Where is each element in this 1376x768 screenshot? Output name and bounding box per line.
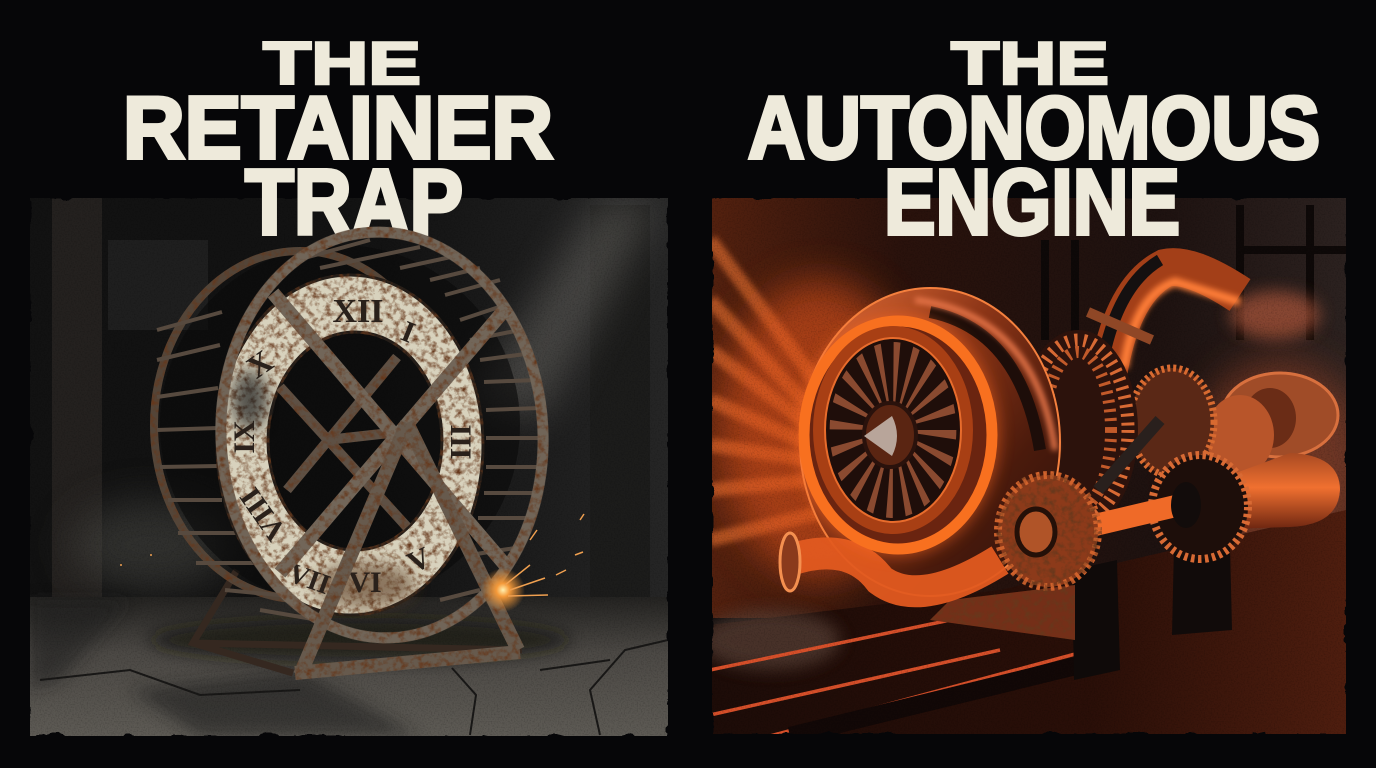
floor <box>710 510 1346 736</box>
rear drum <box>1206 395 1274 475</box>
roman numerals: IX <box>228 420 261 454</box>
exhaust pipe <box>1108 267 1240 375</box>
smoke <box>70 500 230 590</box>
left pillar <box>52 198 102 618</box>
roman numerals: III <box>444 424 477 460</box>
drum teeth row 2 <box>1045 352 1111 508</box>
front ring <box>211 224 553 646</box>
roman numerals: V <box>402 541 436 580</box>
front cross bars <box>273 293 507 573</box>
roman numerals: I <box>396 315 420 350</box>
rails <box>710 618 1090 736</box>
a-frame stand <box>295 423 520 675</box>
gear 2 <box>1152 455 1248 559</box>
rail shadow <box>790 665 1080 736</box>
fan ring inner glow <box>813 326 973 534</box>
light beam <box>470 200 660 420</box>
concrete floor <box>30 597 668 737</box>
orange speed rays <box>710 240 830 540</box>
dial rust patch <box>315 563 415 607</box>
steam <box>1230 291 1320 339</box>
pipe dark shine <box>1103 260 1160 360</box>
title: the autonomous engine <box>748 30 1320 254</box>
title: the autonomous engine: ENGINE <box>884 150 1180 254</box>
roman numerals: VII <box>284 558 334 601</box>
stand 1 <box>1072 560 1120 680</box>
rear wheel hub <box>1244 388 1296 448</box>
right haze <box>1200 342 1346 534</box>
rear wheel <box>1222 373 1338 457</box>
inner dial shadow <box>232 370 268 430</box>
glowing ring <box>804 321 992 549</box>
inlet mouth <box>780 533 800 591</box>
title: the retainer trap: RETAINER <box>123 78 553 177</box>
rear cross bars <box>280 357 407 527</box>
pipe hot shine <box>1124 282 1240 368</box>
grit right <box>710 198 1346 734</box>
ring glow <box>798 315 998 555</box>
gear 3 <box>1130 368 1214 476</box>
pipe flange <box>1088 312 1152 340</box>
clock face <box>217 275 483 615</box>
floor dark patches <box>30 600 420 736</box>
housing tube dark band <box>930 312 1040 450</box>
torn edge: left panel <box>22 190 676 744</box>
background pillars <box>1045 205 1346 340</box>
title: the autonomous engine: THE <box>951 30 1109 97</box>
turbine housing <box>800 288 1060 596</box>
drum teeth row 1 <box>1028 340 1128 520</box>
back frame <box>193 570 522 673</box>
inlet pipe <box>790 553 1000 591</box>
lower cylinder <box>1190 453 1340 530</box>
panel: autonomous engine background <box>700 198 1370 736</box>
title: the autonomous engine: AUTONOMOUS <box>748 78 1320 177</box>
gear 1 <box>998 475 1098 587</box>
roman numerals: VI <box>348 566 382 599</box>
gear hub <box>1017 509 1055 555</box>
fan blades <box>853 375 933 485</box>
housing tube highlight <box>915 300 1055 450</box>
base block <box>930 585 1075 640</box>
roman numerals: XII <box>332 293 384 330</box>
stand 2 <box>1172 545 1232 635</box>
lower left smoke <box>700 610 840 670</box>
right pillar <box>624 205 650 597</box>
floor cracks <box>40 640 668 735</box>
nose cone <box>864 416 897 456</box>
title: the retainer trap <box>123 30 553 254</box>
fan disc <box>825 338 961 522</box>
title: the retainer trap: TRAP <box>245 150 463 254</box>
roman numerals: VIII <box>233 481 293 547</box>
shaft collar <box>1171 482 1201 528</box>
wheel rungs <box>157 240 541 622</box>
hub <box>864 403 916 467</box>
turbine engine <box>780 260 1340 680</box>
title: the retainer trap: THE <box>263 30 421 97</box>
roman numerals: X <box>240 342 279 385</box>
roman numerals <box>228 293 477 601</box>
toothed drum <box>1018 330 1138 530</box>
back ring <box>154 251 446 599</box>
grit left <box>30 198 668 736</box>
floor shadow <box>150 618 570 662</box>
orange ambient glow <box>720 280 920 580</box>
spark streaks <box>120 514 584 596</box>
shaft <box>1095 505 1180 525</box>
back window <box>108 240 208 330</box>
panel: retainer trap background <box>30 198 668 737</box>
chain belt <box>1098 420 1160 490</box>
wheel interior darkness <box>160 245 520 605</box>
torn edge: right panel <box>704 190 1354 742</box>
hamster wheel clock <box>120 224 584 675</box>
sparks <box>481 568 525 612</box>
